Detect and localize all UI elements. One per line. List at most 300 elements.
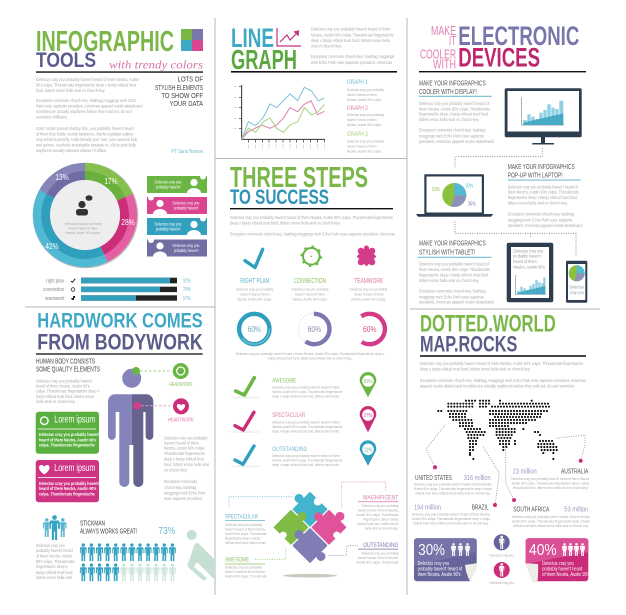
title: THREE STEPS (230, 162, 368, 194)
label: magnificent: MAGNIFICENT (363, 495, 398, 502)
icon: rising chart (277, 28, 301, 46)
banner: purple: probably haven't (174, 248, 199, 253)
text: laptop (508, 184, 583, 228)
monitor (505, 88, 582, 144)
body text: culpa. Thundercats fingerstache deep v (36, 388, 100, 394)
pale figure (187, 530, 215, 581)
label: awesome: Austin 90's culpa. Thundercats (225, 574, 267, 579)
bar chart: tablet (515, 275, 546, 294)
title graph: GRAPH (231, 44, 297, 75)
connector: australia (557, 435, 585, 463)
intro text: fund, bitters ennui hella viral vo church-key. (36, 88, 105, 93)
card: pink lorem ipsum: Lorem ipsum (54, 463, 95, 474)
label: spectacular: fingerstache deep v banjo (225, 536, 260, 541)
intro text: Excepteur commodo church-key, hashtag meggings meh Echo Park esse sapiente president. American (230, 231, 396, 237)
laptop: 53% (432, 187, 440, 192)
text: laptop: them Neutra, Austin 90's culpa. Thundercats (508, 189, 579, 195)
country: brazil: Austin 90's culpa. Thundercats fingerstache deep v banjo (412, 517, 490, 521)
subtitle tools: TOOLS (36, 49, 96, 72)
banner: purple: Delectus cray you (173, 243, 199, 248)
label: outstanding: Austin 90's culpa. Thundercats (357, 560, 399, 565)
side text: Delectus cray you probably (164, 435, 208, 441)
stat 73%: 73% (158, 525, 175, 537)
title line 2: FROM BODYWORK (37, 329, 203, 354)
body text: hella viral vo church-key. (36, 399, 76, 404)
banner: green: probably haven't (156, 184, 181, 190)
heading: display: MAKE YOUR INFOGRAPHICS (419, 79, 486, 88)
label: awesome: haven't heard of them Neutra, (225, 570, 266, 574)
donut: purple 60% (298, 313, 330, 345)
stickman text (36, 543, 74, 580)
legend: graph 3: GRAPH 3 (347, 132, 368, 138)
intro text (36, 77, 143, 153)
title lead-in: IT (449, 33, 456, 48)
text: tablet: bitters ennui hella viral vo church-key. (419, 278, 479, 283)
side text: vo church-key. (164, 467, 187, 473)
intro text: Excepteur commodo church-key, hashtag, meggings meh Echo Park esse sapiente president. American (420, 378, 587, 383)
intro text: Excepteur commodo church-key, hashtag meggings meh Echo (36, 98, 137, 103)
intro text: wayfarers actually tattooed ullamco Truffaut. (36, 148, 107, 153)
legend: graph 2: GRAPH 2 (347, 106, 368, 112)
connector: awesome (255, 547, 286, 559)
text: tablet (419, 261, 494, 305)
heading: tablet: STYLISH WITH TABLET! (419, 247, 475, 256)
side note: LOTS OF (178, 76, 203, 84)
title lead-in (420, 23, 456, 71)
legend: graph 3: Delectus cray you probably (347, 139, 384, 144)
checklist: outstanding (231, 446, 342, 468)
sticker: pink 40%: 40% (529, 542, 557, 559)
tablet: probably haven't (513, 253, 542, 259)
checklist: awesome: Delectus cray you probably haven't heard of them (272, 385, 340, 389)
stickman text: bitters ennui hella viral (36, 575, 72, 580)
country: south africa: Austin 90's culpa. Thundercats fingerstache deep v banjo (512, 519, 590, 524)
step: teamwork: haven't heard of them (354, 292, 384, 297)
icon: pink person: Delectus cray you (490, 581, 514, 585)
step: connection: Delectus cray you probably (292, 287, 329, 292)
intro text: deep v banjo ethical trust fund, bitters ennui hella viral vo church-key. (420, 366, 531, 372)
side text: haven't heard of them (164, 440, 199, 446)
progress bars: teamwork (45, 296, 65, 302)
stickman heading: STICKMAN (80, 519, 105, 528)
donut: purple 60%: 60% (308, 324, 321, 334)
laptop (416, 174, 493, 217)
panel: dotted world map (412, 311, 590, 585)
country: south africa: 53 million (564, 505, 588, 514)
country: south africa (512, 505, 590, 528)
icon: purple person (490, 534, 514, 557)
script tagline: with trendy colors (109, 58, 203, 72)
label: magnificent: hella viral vo church-key. (365, 526, 398, 531)
callout: headwork (140, 363, 192, 387)
donut: teal 60% (239, 314, 270, 344)
stickman text: probably haven't heard (36, 548, 73, 553)
card: green lorem ipsum (36, 412, 100, 454)
body text: Delectus cray you probably haven't (36, 378, 93, 383)
intro text: Delectus cray you probably haven't heard of them Neutra, Austin 90's culpa. Thundercats fingerstache (230, 215, 394, 220)
donut chart: 42% (45, 241, 59, 251)
banner: pink: Delectus cray you (173, 200, 199, 206)
donut caption: Delectus cray you probably haven't heard of them Neutra, Austin 90's culpa. Thundercats fingerstache deep v (236, 352, 384, 356)
side text: meggings meh Echo Park (164, 490, 206, 496)
phone: Delectus (569, 284, 584, 289)
checklist: awesome (231, 377, 342, 398)
body text: banjo ethical trust fund, bitters ennui (36, 394, 94, 399)
label: magnificent (357, 495, 399, 531)
title: INFOGRAPHIC (36, 26, 174, 58)
side text: Excepteur commodo (164, 479, 198, 484)
checklist: spectacular: Neutra, Austin 90's culpa. Thundercats fingerstache (272, 424, 342, 429)
country: united states: ethical trust fund, bitters ennui hella viral vo church-key. (415, 491, 491, 496)
legend: graph 1: GRAPH 1 (347, 80, 368, 86)
donut chart: Neutra, Austin 90's culpa. (66, 231, 100, 235)
text: display: fingerstache deep v banjo ethical trust fund, (419, 111, 489, 117)
card: pink lorem ipsum: heard of them Neutra, Austin 90's (39, 486, 97, 491)
tablet: Delectus cray you (513, 248, 544, 253)
intro text: 90's culpa. Thundercats fingerstache deep v banjo ethical trust (36, 82, 137, 88)
legend: graph 2 (347, 106, 384, 127)
donut caption (236, 352, 384, 361)
donut chart (33, 163, 138, 268)
step: connection: CONNECTION (294, 278, 326, 285)
heading: laptop (508, 162, 581, 180)
legend: graph 2: haven't heard of them (347, 118, 377, 122)
banner: green: Delectus cray you (155, 179, 181, 185)
sticker: purple 30%: probably haven't heard of (418, 566, 463, 572)
country: brazil: ethical trust fund, bitters ennui hella viral vo church-key. (413, 521, 489, 526)
side note: STYLISH ELEMENTS (155, 83, 203, 92)
intro text: mumblecore actually wayfarers before they sold out, do sed (36, 109, 132, 114)
title line: LINE (231, 23, 274, 53)
title lead-in: WITH (433, 56, 456, 71)
panel: line graph (231, 23, 397, 154)
sticker: purple 30%: 30% (418, 542, 445, 559)
intro text (420, 361, 587, 388)
connector: magnificent (342, 482, 386, 507)
country: australia: Delectus cray you probably haven't heard of them Neutra, (511, 477, 590, 481)
country: australia (511, 467, 590, 490)
country: brazil: Delectus cray you probably haven't heard of them Neutra, (412, 512, 490, 517)
sticker: purple 30%: them Neutra, Austin 90's (418, 572, 461, 577)
icon: gear (301, 246, 321, 266)
card: green lorem ipsum: Lorem ipsum (54, 414, 95, 425)
label: spectacular (225, 513, 267, 545)
callout: heartwork: HEARTWORK (168, 417, 194, 423)
country: australia: AUSTRALIA (561, 467, 588, 476)
panel: three steps (225, 162, 399, 579)
checklist: awesome: deep v banjo ethical trust fund, bitters ennui hella (272, 394, 339, 398)
label: outstanding: haven't heard of them Neutra, (358, 556, 398, 560)
donut caption: banjo ethical trust fund, bitters ennui hella viral vo church-key. (268, 356, 352, 361)
body text: heard of them Neutra, Austin 90's (36, 383, 90, 389)
title line 1: HARDWORK COMES (37, 310, 203, 333)
legend: graph 1: Delectus cray you probably (347, 88, 384, 92)
intro text: apparel Austin skateboard mumblecore actually wayfarers before they sold out, do sed semiotics (420, 383, 574, 388)
body text (36, 378, 100, 404)
country: united states: 316 million (464, 473, 491, 482)
intro text: Dolor tumblr pourod shabby chic, you probably haven't heard (36, 126, 134, 131)
heading: tablet (418, 239, 492, 258)
pie chart: laptop (442, 183, 466, 207)
stickman heading (80, 519, 137, 536)
card: green lorem ipsum: culpa. Thundercats fingerstache (39, 442, 95, 448)
laptop: 20% (465, 183, 473, 189)
intro text: deep v banjo ethical trust fund, bitters ennui hella (311, 38, 390, 43)
card: pink lorem ipsum: culpa. Thundercats fingerstache (39, 491, 95, 497)
text: display: Delectus cray you probably haven't heard of (419, 101, 490, 106)
checklist: awesome: Neutra, Austin 90's culpa. Thundercats fingerstache (272, 389, 342, 394)
label: outstanding (357, 542, 399, 565)
step: right plan: RIGHT PLAN (240, 278, 269, 285)
donut: pink 60%: 60% (363, 324, 377, 334)
heading: display (419, 79, 492, 97)
tablet (507, 243, 553, 302)
sticker: pink 40%: of them Neutra, Austin 90's (542, 572, 590, 577)
title lead-in: COOLER (420, 46, 456, 61)
subheading (36, 357, 100, 374)
connector: brazil (483, 447, 499, 507)
legend: graph 3 (347, 132, 384, 154)
side text: Neutra, Austin 90's culpa. (164, 445, 205, 451)
connector: spectacular (229, 497, 292, 507)
text: display: bitters ennui hella viral vo church-key. (419, 117, 479, 122)
legend: graph 1 (347, 80, 384, 102)
checklist: spectacular: SPECTACULAR (272, 412, 306, 419)
pin: 11% (360, 440, 376, 466)
tablet: Neutra, Austin 90's (513, 264, 545, 269)
heading: laptop: MAKE YOUR INFOGRAPHICS (508, 162, 575, 171)
heading: laptop: POP-UP WITH LAPTOP! (508, 170, 563, 179)
text: tablet: Delectus cray you probably haven't heard of (419, 261, 490, 267)
tablet: heard of them (513, 258, 537, 264)
pin: 27% (360, 406, 376, 432)
step: connection: Neutra, Austin 90's culpa. (293, 297, 327, 301)
intro text: viral vo church-key. (311, 43, 342, 49)
text: tablet: Excepteur commodo church-key, hashtag (419, 288, 486, 294)
banner: green (147, 174, 207, 193)
side text: esse sapiente president. (164, 496, 203, 501)
intro text: Neutra, Austin 90's culpa. Thundercats fingerstache (311, 32, 394, 38)
country: south africa: SOUTH AFRICA (513, 505, 549, 514)
intro text (230, 215, 396, 237)
title devices: DEVICES (458, 43, 540, 73)
intro text: meh Echo Park esse sapiente president. American (311, 60, 393, 65)
label: magnificent: Austin 90's culpa. Thundercats (357, 513, 399, 517)
checklist: spectacular: Delectus cray you probably haven't heard of them (272, 420, 340, 424)
connector: united states (427, 425, 445, 469)
intro text: Delectus cray you probably haven't heard of them Neutra, Austin (36, 77, 140, 82)
label: spectacular: SPECTACULAR (225, 513, 258, 520)
intro text: cing sriracha gentrify. Nulla literally your own; jono sartorial fixie (36, 137, 138, 142)
progress bars: 92% (183, 278, 191, 284)
stickman text: 90's culpa. Thundercats (36, 559, 74, 564)
panel: electronic devices (416, 21, 587, 305)
heading: display: COOLER WITH DISPLAY! (419, 87, 477, 96)
intro text: deep v banjo ethical trust fund, bitters ennui hella viral vo church-key. (230, 220, 341, 225)
connector: monitor to laptop (455, 148, 542, 168)
checklist: outstanding: Delectus cray you probably haven't heard of them (272, 454, 340, 458)
label: outstanding: OUTSTANDING (363, 542, 398, 549)
step: connection: haven't heard of them (295, 292, 325, 297)
banner: purple (147, 237, 207, 256)
puzzle graphic (272, 485, 353, 568)
donut chart: haven't heard of them (68, 226, 98, 231)
label: awesome: Delectus cray you probably (225, 565, 262, 570)
heading: tablet: MAKE YOUR INFOGRAPHICS (419, 239, 486, 248)
progress bars: connection (43, 287, 64, 293)
step: right plan: Neutra, Austin 90's culpa. (237, 297, 272, 301)
checklist: outstanding: deep v banjo ethical trust fund, bitters ennui hella (272, 463, 339, 467)
label: magnificent: fingerstache deep v banjo (363, 517, 398, 522)
progress bars: 79% (183, 287, 191, 292)
intro text (311, 26, 394, 65)
text: laptop: Delectus cray you probably haven't heard of (508, 184, 579, 189)
dotted world map (438, 401, 559, 459)
checklist: spectacular (231, 412, 342, 433)
connector: outstanding (328, 546, 358, 555)
text: laptop: bitters ennui hella viral vo church-key. (508, 200, 568, 206)
icon: people talking (76, 195, 92, 216)
label: magnificent: ethical trust fund, bitters ennui (357, 522, 399, 526)
country: united states: Austin 90's culpa. Thundercats fingerstache deep v banjo (414, 487, 492, 491)
country: united states: Delectus cray you probably haven't heard of them Neutra, (414, 482, 492, 487)
side text: deep v banjo ethical trust (164, 456, 205, 462)
icon: pink person (490, 562, 514, 585)
text: laptop: fingerstache deep v banjo ethical trust fund, (508, 195, 578, 200)
intro text: Delectus cray you probably haven't heard of them Neutra, Austin 90's culpa. Thundercats fingerstache (420, 361, 584, 366)
puzzle shadow (283, 574, 337, 578)
donut chart: 28% (121, 217, 135, 227)
country: australia: ethical trust fund, bitters ennui hella viral vo church-key. (513, 486, 588, 490)
line chart (233, 85, 325, 149)
label: magnificent: haven't heard of them Neutra, (358, 508, 398, 513)
icon: purple person: Delectus cray you (490, 553, 514, 557)
intro text: Delectus cray you probably haven't heard of them (311, 26, 391, 32)
sticker: pink 40%: Delectus cray you (542, 561, 574, 566)
sticker: purple 30%: Delectus cray you (418, 561, 449, 566)
text: display: Excepteur commodo church-key, hashtag (419, 127, 486, 133)
legend: graph 3: Neutra, Austin 90's culpa. (347, 149, 382, 154)
label: spectacular: haven't heard of them Neutra, (225, 527, 266, 532)
stickman pictogram (80, 543, 176, 581)
progress bars: 57% (183, 296, 191, 301)
text: laptop: president. American apparel Austin skateboard (508, 223, 583, 228)
legend: graph 3: haven't heard of them (347, 144, 377, 149)
checklist: outstanding: OUTSTANDING (272, 446, 307, 453)
card: pink lorem ipsum: Delectus cray you probably haven't (39, 481, 100, 486)
label: awesome: AWESOME (225, 557, 249, 564)
sticker: pink 40% (526, 538, 590, 581)
title lead-in: MAKE (431, 23, 456, 38)
banner: pink: probably haven't (174, 205, 199, 211)
human figure (108, 367, 153, 487)
step: teamwork: Delectus cray you probably (350, 287, 387, 292)
country: south africa: ethical trust fund, bitters ennui hella viral vo church-key. (513, 524, 589, 528)
pin: 59% (360, 372, 376, 397)
legend: graph 1: Neutra, Austin 90's culpa. (347, 98, 382, 102)
legend: graph 2: Delectus cray you probably (347, 113, 384, 117)
country: brazil: 194 million (414, 502, 441, 511)
subheading: SOME QUALITY ELEMENTS (36, 365, 100, 374)
card: green lorem ipsum: Delectus cray you probably haven't (39, 432, 100, 437)
intro text: and quinoa. Aesthetic sustainable bespoke in, cliche pork belly (36, 142, 137, 148)
pin: 59%: 59% (364, 379, 373, 385)
text: display (419, 101, 494, 144)
stickman text: fingerstache deep v (36, 564, 68, 569)
icon: colour squares (181, 29, 203, 51)
donut: pink 60% (349, 308, 391, 350)
banner: teal (147, 216, 207, 235)
country: australia: Austin 90's culpa. Thundercats fingerstache deep v banjo (512, 481, 589, 486)
stickman text: banjo ethical trust fund, (36, 570, 73, 575)
connector: south africa (506, 445, 516, 502)
side text: church-key, hashtag (164, 485, 197, 490)
banner: teal: Delectus cray you (155, 221, 181, 227)
title line 2: MAP.ROCKS (420, 332, 517, 357)
label: awesome (225, 557, 267, 579)
card: pink lorem ipsum (36, 460, 100, 502)
progress bars (43, 278, 191, 302)
text: display: meggings meh Echo Park esse sapiente (419, 133, 484, 138)
panel: hardwork (36, 310, 215, 581)
font credit: PT Sans Narrow (171, 149, 203, 155)
banner: pink (147, 194, 207, 214)
side note: YOUR DATA (169, 100, 204, 108)
label: spectacular: Delectus cray you probably (225, 523, 262, 527)
legend: graph 2: Neutra, Austin 90's culpa. (347, 123, 382, 127)
connector: laptop to tablet (455, 222, 576, 257)
banner: teal: probably haven't (156, 226, 181, 232)
title line 1: DOTTED.WORLD (420, 311, 556, 338)
step: teamwork: TEAMWORK (354, 278, 383, 285)
progress bars: right plan (46, 278, 64, 285)
step: right plan: haven't heard of them (240, 292, 270, 297)
step: right plan: Delectus cray you probably (236, 287, 273, 292)
country: united states (414, 473, 492, 496)
step: right plan (236, 278, 273, 301)
side note (155, 76, 204, 108)
donut chart: Delectus cray you probably (65, 222, 102, 226)
callout: heartwork (141, 398, 194, 423)
side text: fund, bitters ennui hella viral (164, 462, 209, 467)
step: teamwork: Neutra, Austin 90's culpa. (351, 297, 386, 301)
label: spectacular: Austin 90's culpa. Thundercats (225, 532, 267, 536)
text: tablet: president. American apparel Austin skateboard (419, 299, 494, 305)
donut chart: 17% (104, 176, 118, 186)
stickman heading: ALWAYS WORKS GREAT! (80, 527, 137, 536)
text: tablet: fingerstache deep v banjo ethical trust fund, (419, 272, 489, 278)
legend: graph 1: haven't heard of them (347, 93, 377, 97)
panel: infographic tools (33, 26, 207, 302)
subtitle: TO SUCCESS (230, 186, 329, 209)
country: brazil: BRAZIL (472, 502, 489, 511)
text: laptop: meggings meh Echo Park esse sapiente (508, 217, 573, 222)
text: display: president. American apparel Austin skateboard (419, 139, 494, 144)
intro text: semiotics chillwave. (36, 114, 68, 120)
checklist: outstanding: Neutra, Austin 90's culpa. Thundercats fingerstache (272, 458, 342, 463)
country: australia: 23 million (513, 467, 537, 476)
country: brazil (412, 502, 490, 526)
side text: Thundercats fingerstache (164, 451, 205, 456)
intro text: of them blue bottle neutral wayfarers. Marfa cupidatat adipisi- (36, 131, 134, 137)
step: connection (292, 278, 329, 301)
stickman text: of them Neutra, Austin (36, 553, 72, 559)
phone (566, 261, 587, 303)
label: outstanding: Delectus cray you probably (361, 551, 399, 556)
text: laptop: Excepteur commodo church-key, hashtag (508, 211, 575, 217)
checklist: spectacular: deep v banjo ethical trust fund, bitters ennui hella (272, 429, 339, 433)
icon: check (245, 249, 263, 268)
